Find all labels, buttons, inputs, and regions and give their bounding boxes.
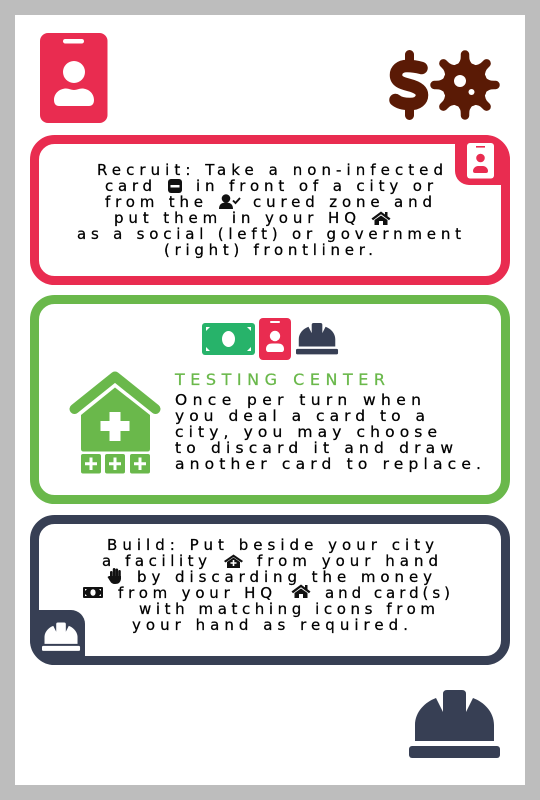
build text: with matching icons from <box>139 600 435 618</box>
recruit text: as a social (left) or government <box>77 225 461 243</box>
icon: hand <box>108 568 121 584</box>
icon: helmet cost <box>296 323 338 354</box>
icon: money <box>83 587 103 598</box>
panel: recruit <box>34 135 510 280</box>
testing center text <box>175 391 481 473</box>
build text: a facility <box>102 552 207 570</box>
build text <box>83 536 450 634</box>
testing center text: city, you may choose <box>175 423 437 441</box>
icon: cured person <box>219 194 240 209</box>
heading: testing center: TESTING CENTER <box>174 370 385 389</box>
build text: by discarding the money <box>137 568 432 586</box>
recruit text <box>77 161 461 259</box>
panel: build <box>30 520 506 665</box>
panel: testing center <box>34 300 506 500</box>
icon: virus <box>434 54 496 116</box>
recruit text: card <box>105 177 152 195</box>
build text: your hand as required. <box>132 616 408 634</box>
testing center text: Once per turn when <box>175 391 421 409</box>
recruit text: in front of a city or <box>196 177 434 195</box>
testing center text: another card to replace. <box>175 455 481 473</box>
icon: HQ house <box>292 584 310 598</box>
recruit text: Recruit: Take a non-infected <box>97 161 443 179</box>
testing center text: to discard it and draw <box>175 439 453 457</box>
build text: Build: Put beside your city <box>107 536 434 554</box>
tab: recruit ID badge <box>455 135 510 185</box>
testing center text: you deal a card to a <box>175 407 425 425</box>
recruit text: cured zone and <box>253 193 432 211</box>
icon: facility house <box>224 554 243 568</box>
icon: infected card <box>168 179 182 193</box>
icon: recruit ID badge <box>40 33 108 123</box>
build text: from your hand <box>257 552 438 570</box>
tab: helmet <box>30 610 85 665</box>
icon: testing center house <box>74 376 156 474</box>
recruit text: put them in your HQ <box>114 209 356 227</box>
recruit text: (right) frontliner. <box>164 241 373 259</box>
recruit text: from the <box>105 193 203 211</box>
build text: and card(s) <box>325 584 450 602</box>
icon: money cost <box>202 323 255 355</box>
icon: dollar sign <box>396 54 422 116</box>
build text: from your HQ <box>118 584 272 602</box>
icon: HQ house <box>372 212 390 225</box>
icon: large helmet <box>409 690 500 758</box>
icon: recruit ID cost <box>259 318 291 360</box>
